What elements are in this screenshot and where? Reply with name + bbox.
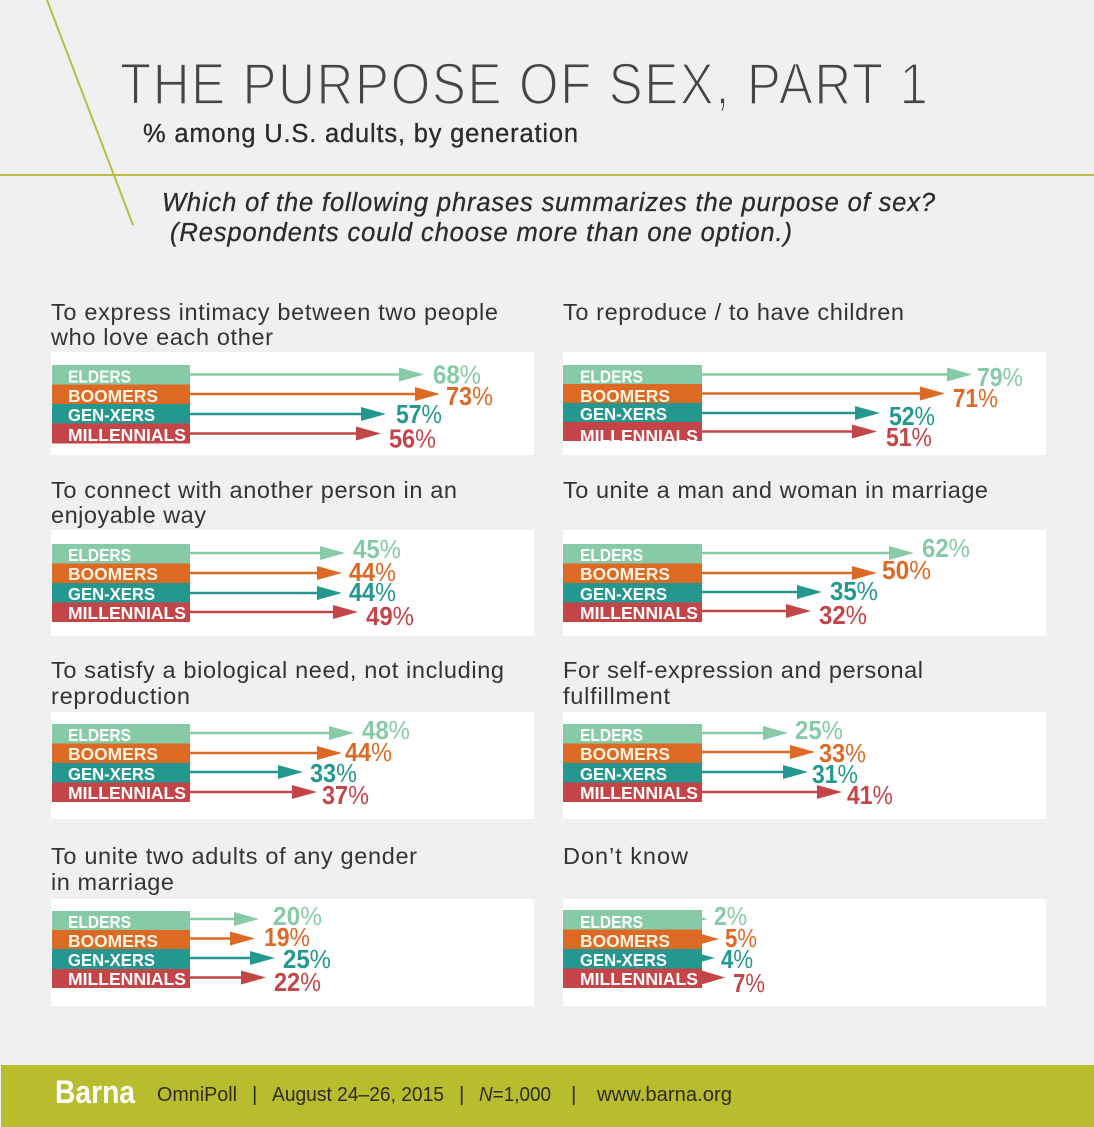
row: boomers 73%: 73% bbox=[446, 381, 493, 411]
logo: Barna: Barna bbox=[55, 1074, 135, 1110]
row: gen-xers 52%: GEN-XERS bbox=[580, 404, 667, 424]
panel: self-expression bbox=[563, 657, 1046, 819]
row: gen-xers 25%: GEN-XERS bbox=[68, 950, 155, 970]
heading: self-expression: For self-expression and personal bbox=[563, 657, 923, 683]
footer source text: August 24–26, 2015 bbox=[272, 1083, 444, 1106]
row: millennials 32%: MILLENNIALS bbox=[580, 603, 698, 623]
survey question: Which of the following phrases summarizes the purpose of sex? bbox=[162, 189, 936, 217]
row: elders 2%: ELDERS bbox=[580, 912, 643, 932]
heading: express intimacy: who love each other bbox=[50, 324, 273, 350]
row: elders 79% bbox=[563, 362, 1023, 392]
row: millennials 22%: 22% bbox=[274, 967, 321, 997]
title: THE PURPOSE OF SEX, PART 1 bbox=[120, 52, 928, 117]
panel: express intimacy bbox=[50, 299, 534, 455]
footer source text: | bbox=[459, 1083, 464, 1106]
row: boomers 33%: BOOMERS bbox=[580, 744, 670, 764]
footer source text: www.barna.org bbox=[596, 1083, 732, 1106]
heading: connect: enjoyable way bbox=[51, 502, 206, 528]
row: elders 20%: ELDERS bbox=[68, 912, 131, 932]
row: gen-xers 35%: 35% bbox=[830, 576, 878, 606]
footer source text: N=1,000 bbox=[479, 1083, 551, 1106]
row: boomers 44%: BOOMERS bbox=[68, 744, 158, 764]
row: boomers 19%: BOOMERS bbox=[68, 931, 158, 951]
row: millennials 37% bbox=[52, 780, 369, 810]
footer source text: OmniPoll bbox=[157, 1083, 237, 1106]
row: gen-xers 44% bbox=[52, 577, 396, 607]
row: elders 45% bbox=[52, 534, 401, 565]
row: boomers 50%: 50% bbox=[882, 555, 931, 585]
row: millennials 37%: MILLENNIALS bbox=[68, 783, 186, 803]
row: elders 62%: ELDERS bbox=[580, 545, 643, 565]
panel: unite two adults bbox=[51, 843, 534, 1006]
row: elders 62% bbox=[563, 533, 970, 565]
row: elders 20%: 20% bbox=[273, 901, 322, 931]
row: gen-xers 33% bbox=[52, 758, 357, 788]
row: millennials 51%: 51% bbox=[886, 422, 932, 452]
row: elders 48%: 48% bbox=[362, 715, 410, 745]
row: gen-xers 31%: 31% bbox=[812, 759, 858, 789]
footer source text bbox=[157, 1083, 732, 1106]
row: boomers 73%: BOOMERS bbox=[68, 386, 158, 406]
heading: unite man and woman: To unite a man and woman in marriage bbox=[563, 477, 988, 503]
panel: don't know bbox=[563, 843, 1046, 1006]
row: elders 48%: ELDERS bbox=[68, 725, 131, 745]
row: boomers 5% bbox=[563, 923, 757, 953]
row: millennials 49%: 49% bbox=[366, 601, 414, 631]
heading: express intimacy: To express intimacy between two people bbox=[51, 299, 498, 325]
row: gen-xers 44%: 44% bbox=[349, 577, 396, 607]
survey question: (Respondents could choose more than one option.) bbox=[170, 219, 792, 247]
panel: reproduce bbox=[563, 299, 1046, 455]
row: boomers 44%: 44% bbox=[345, 737, 392, 767]
row: millennials 49% bbox=[52, 601, 414, 631]
row: millennials 41%: 41% bbox=[847, 780, 893, 810]
row: elders 68% bbox=[52, 360, 481, 390]
row: millennials 41%: MILLENNIALS bbox=[580, 783, 698, 803]
row: boomers 44% bbox=[52, 557, 396, 587]
row: millennials 41% bbox=[563, 780, 893, 810]
row: gen-xers 57% bbox=[52, 399, 442, 429]
row: elders 25%: 25% bbox=[795, 715, 843, 745]
heading: biological need: reproduction bbox=[51, 683, 190, 709]
row: millennials 32%: 32% bbox=[819, 600, 867, 630]
row: boomers 19% bbox=[52, 922, 310, 952]
row: elders 79%: ELDERS bbox=[580, 366, 643, 386]
heading: self-expression: fulfillment bbox=[563, 683, 670, 709]
row: boomers 50%: BOOMERS bbox=[580, 564, 670, 584]
row: boomers 19%: 19% bbox=[264, 922, 310, 952]
row: gen-xers 31% bbox=[563, 759, 858, 789]
row: gen-xers 4% bbox=[563, 944, 753, 974]
row: boomers 5%: BOOMERS bbox=[580, 931, 670, 951]
row: elders 2% bbox=[563, 901, 747, 932]
row: boomers 50% bbox=[563, 555, 931, 585]
row: millennials 7%: MILLENNIALS bbox=[580, 969, 698, 989]
heading: unite two adults: To unite two adults of any gender bbox=[51, 843, 417, 869]
row: boomers 44%: 44% bbox=[349, 557, 396, 587]
row: boomers 71%: BOOMERS bbox=[580, 386, 670, 406]
row: elders 25%: ELDERS bbox=[580, 725, 643, 745]
heading: biological need: To satisfy a biological need, not including bbox=[51, 657, 504, 683]
footer source text: | bbox=[571, 1083, 576, 1106]
row: boomers 33%: 33% bbox=[819, 738, 866, 768]
row: gen-xers 35% bbox=[563, 576, 878, 606]
row: millennials 56% bbox=[52, 424, 436, 454]
row: elders 79%: 79% bbox=[977, 362, 1023, 392]
row: millennials 56%: 56% bbox=[389, 424, 436, 454]
row: boomers 71%: 71% bbox=[953, 383, 998, 413]
row: gen-xers 33%: 33% bbox=[310, 758, 357, 788]
heading: don't know: Don’t know bbox=[563, 843, 689, 869]
panel: connect bbox=[51, 477, 534, 636]
row: millennials 49%: MILLENNIALS bbox=[68, 603, 186, 623]
row: elders 45%: 45% bbox=[353, 534, 401, 564]
row: elders 2%: 2% bbox=[714, 901, 747, 931]
row: boomers 73% bbox=[52, 381, 493, 411]
panel: biological need bbox=[51, 657, 534, 819]
subtitle: % among U.S. adults, by generation bbox=[143, 120, 578, 148]
row: gen-xers 31%: GEN-XERS bbox=[580, 764, 667, 784]
row: boomers 5%: 5% bbox=[725, 923, 757, 953]
row: gen-xers 52% bbox=[563, 401, 935, 431]
row: gen-xers 33%: GEN-XERS bbox=[68, 764, 155, 784]
row: millennials 22% bbox=[52, 967, 321, 997]
heading: unite two adults: in marriage bbox=[51, 869, 174, 895]
row: gen-xers 25% bbox=[52, 944, 331, 974]
row: gen-xers 52%: 52% bbox=[889, 401, 935, 431]
row: elders 45%: ELDERS bbox=[68, 545, 131, 565]
heading: reproduce: To reproduce / to have children bbox=[563, 299, 904, 325]
row: gen-xers 4%: GEN-XERS bbox=[580, 950, 667, 970]
row: gen-xers 57%: GEN-XERS bbox=[68, 405, 155, 425]
footer bar bbox=[1, 1065, 1094, 1127]
row: gen-xers 35%: GEN-XERS bbox=[580, 584, 667, 604]
row: millennials 51%: MILLENNIALS bbox=[580, 426, 698, 446]
row: millennials 56%: MILLENNIALS bbox=[68, 425, 186, 445]
row: boomers 44%: BOOMERS bbox=[68, 564, 158, 584]
row: millennials 37%: 37% bbox=[322, 780, 369, 810]
row: elders 62%: 62% bbox=[922, 533, 970, 563]
row: elders 25% bbox=[563, 715, 843, 745]
survey question bbox=[162, 189, 936, 247]
row: boomers 71% bbox=[563, 383, 998, 413]
row: gen-xers 25%: 25% bbox=[283, 944, 331, 974]
row: elders 68%: ELDERS bbox=[68, 366, 131, 386]
row: boomers 33% bbox=[563, 738, 866, 768]
row: boomers 44% bbox=[52, 737, 392, 767]
row: gen-xers 44%: GEN-XERS bbox=[68, 584, 155, 604]
row: elders 20% bbox=[52, 901, 322, 932]
row: elders 48% bbox=[52, 715, 410, 745]
row: gen-xers 57%: 57% bbox=[396, 399, 442, 429]
row: millennials 32% bbox=[563, 600, 867, 630]
panel: unite man and woman bbox=[563, 477, 1046, 636]
row: gen-xers 4%: 4% bbox=[721, 944, 753, 974]
row: millennials 22%: MILLENNIALS bbox=[68, 969, 186, 989]
row: millennials 7% bbox=[563, 968, 765, 998]
row: millennials 7%: 7% bbox=[733, 968, 765, 998]
heading: connect: To connect with another person in an bbox=[51, 477, 457, 503]
row: millennials 51% bbox=[563, 422, 932, 452]
footer source text: | bbox=[252, 1083, 257, 1106]
row: elders 68%: 68% bbox=[433, 360, 481, 390]
